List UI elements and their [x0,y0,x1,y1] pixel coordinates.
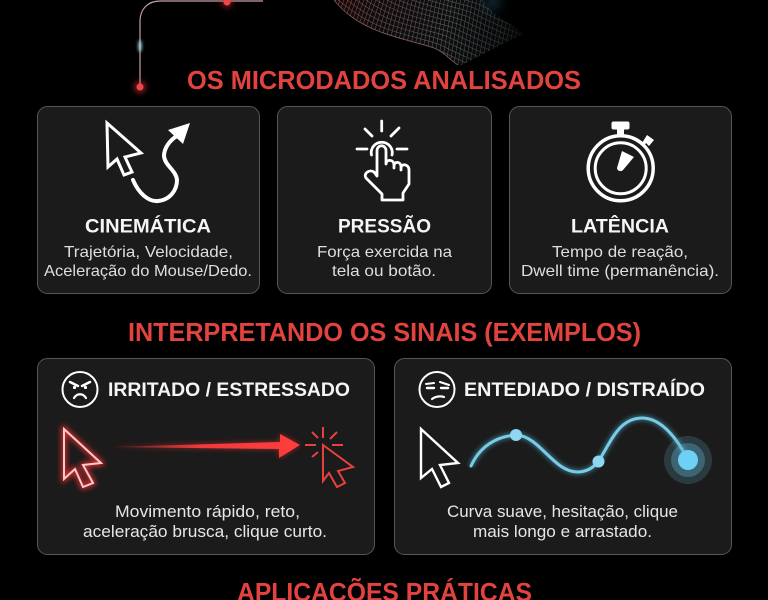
arrow: fast straight motion [108,434,300,458]
description: latência: Dwell time (permanência). [521,263,719,280]
wireframe mesh wave [334,0,522,66]
chart: smooth hesitant trajectory [471,418,712,484]
description: pressão: Força exercida na [317,244,452,261]
icon: pressing hand [357,121,409,200]
description: cinemática: Aceleração do Mouse/Dedo. [44,263,252,280]
description: pressão [317,244,452,280]
icon: red clicking cursor [305,427,353,487]
description: irritado: Movimento rápido, reto, [115,503,300,521]
description: latência: Tempo de reação, [552,244,688,261]
panel: latência [510,106,732,294]
description: irritado [83,503,327,541]
icon: bored face [420,372,454,407]
icon: stopwatch [588,122,654,201]
label: pressão: PRESSÃO [338,214,431,238]
title: entediado: ENTEDIADO / DISTRAÍDO [464,378,705,401]
description: cinemática: Trajetória, Velocidade, [64,244,233,261]
description: latência [521,244,719,280]
panel: entediado [394,358,732,554]
panel: cinemática [38,106,260,294]
description: entediado: Curva suave, hesitação, clique [447,503,678,521]
circuit line with nodes [134,0,263,93]
label: latência: LATÊNCIA [571,214,669,238]
description: cinemática [44,244,252,280]
label: cinemática: CINEMÁTICA [85,214,211,238]
heading: microdados: OS MICRODADOS ANALISADOS [187,67,581,95]
icon: angry face [62,372,98,407]
description: irritado: aceleração brusca, clique curto. [83,523,327,541]
panel: irritado [38,358,374,554]
description: entediado: mais longo e arrastado. [473,523,652,541]
description: pressão: tela ou botão. [332,263,436,280]
title: irritado: IRRITADO / ESTRESSADO [108,379,350,401]
icon: cursor with curved arrow [107,123,190,201]
description: entediado [447,503,678,541]
heading: sinais: INTERPRETANDO OS SINAIS (EXEMPLOS) [128,319,641,347]
panel: pressão [278,106,492,294]
icon: glowing start cursor [64,429,101,487]
icon: white cursor [421,429,458,487]
